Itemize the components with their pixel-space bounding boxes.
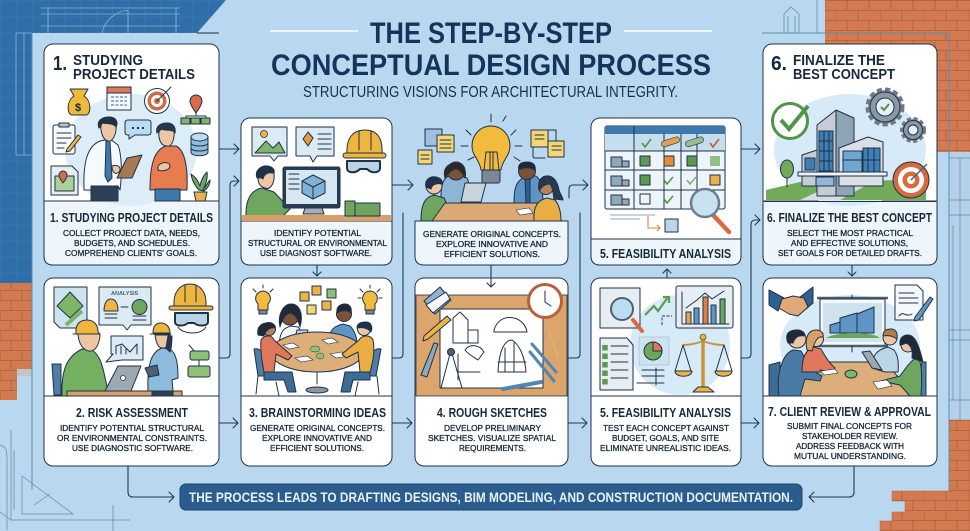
icon: safety goggles (347, 161, 380, 172)
caption: identify: USE DIAGNOST SOFTWARE. (260, 248, 372, 258)
icon: computer monitor (283, 167, 340, 214)
figure: man with clipboard (84, 117, 142, 201)
panel: step 4 rough sketches (415, 278, 568, 466)
caption: step 6: 6. FINALIZE THE BEST CONCEPT (767, 210, 932, 225)
caption: identify: STRUCTURAL OR ENVIRONMENTAL (248, 238, 387, 248)
icon: magnifier (691, 189, 729, 232)
icon: trend arrow (645, 297, 669, 315)
caption: step 2: USE DIAGNOSTIC SOFTWARE. (72, 443, 193, 453)
icon: presentation screen (817, 295, 888, 352)
panel: risk assessment software (241, 118, 392, 265)
caption: step 7: ADDRESS FEEDBACK WITH (796, 441, 904, 451)
connectors (128, 144, 856, 502)
caption: step 3: GENERATE ORIGINAL CONCEPTS. (250, 423, 385, 433)
icon: compass (421, 343, 462, 388)
icon: hard hat (343, 130, 386, 158)
icon: building (798, 110, 887, 196)
icon: pens (503, 332, 558, 389)
caption: step 4: DEVELOP PRELIMINARY (444, 423, 541, 433)
caption: generate (423, 229, 561, 259)
icon: target (893, 162, 929, 198)
caption: step 6: AND EFFECTIVE SOLUTIONS, (791, 238, 908, 248)
caption: step 7 (768, 404, 931, 461)
figure: woman in orange (802, 330, 838, 375)
icon: signed contract (895, 285, 933, 321)
title (270, 17, 712, 82)
grass (766, 180, 926, 200)
icon: balance scale (675, 334, 732, 392)
figures: team at table (421, 162, 543, 221)
icon: money bag: $ (75, 102, 81, 114)
icon: light bulb (461, 114, 522, 183)
icon: magnifier report (600, 288, 642, 331)
figure: man in yellow chair (341, 322, 381, 396)
table (271, 332, 363, 393)
icon: pencil (423, 316, 451, 341)
title: THE STEP-BY-STEP (370, 17, 612, 50)
caption: step 4: 4. ROUGH SKETCHES (437, 405, 547, 420)
drafting lines bottom left (0, 430, 130, 531)
figure: engineer with laptop (52, 320, 182, 396)
icon: database (191, 133, 208, 156)
icon: map pin org chart (181, 95, 210, 124)
heading: step 6: 6. (771, 53, 787, 75)
caption: generate: EXPLORE INNOVATIVE AND (436, 239, 548, 249)
icon: handshake (769, 287, 813, 316)
caption: step 7: STAKEHOLDER REVIEW. (802, 431, 898, 441)
caption: step 6 (767, 210, 932, 258)
icon: gears (868, 90, 924, 141)
arrow: down into step 4 (487, 278, 495, 287)
sketch sheet (440, 309, 543, 388)
icon: coffee mug (845, 370, 857, 378)
icon: flow blocks (188, 345, 210, 377)
caption: step 5 (600, 405, 731, 453)
caption: identify (248, 228, 387, 258)
caption: step 3: 3. BRAINSTORMING IDEAS (249, 405, 386, 420)
icon: sticky notes (300, 286, 336, 314)
caption: step 5: BUDGET, GOALS, AND SITE (612, 433, 719, 443)
icon: site plan (54, 287, 87, 328)
figure: man in orange sweater (150, 123, 187, 201)
caption: step 5 top: 5. FEASIBILITY ANALYSIS (600, 246, 731, 261)
caption: step 3 (249, 405, 386, 453)
figure: man with laptop (862, 329, 898, 372)
icon: clipboard list (53, 123, 81, 154)
figure: woman in orange chair (254, 322, 296, 396)
brick wall left (0, 283, 32, 400)
icon: target (144, 87, 171, 114)
desk and boxes (242, 201, 391, 221)
heading: step 6: BEST CONCEPT (793, 66, 895, 83)
blue building right (949, 152, 970, 420)
panel: feasibility matrix (591, 118, 741, 265)
panel: step 6 finalize the best concept (763, 44, 937, 265)
chart: pie chart (637, 337, 669, 385)
caption: step 2: 2. RISK ASSESSMENT (76, 405, 188, 420)
icon: checklist (600, 338, 633, 390)
icon: speech bubble (125, 120, 151, 139)
icon: calendar (107, 87, 131, 110)
figure: woman in green (873, 335, 926, 396)
caption: step 4: REQUIREMENTS. (459, 443, 526, 453)
caption: step 2: OR ENVIRONMENTAL CONSTRAINTS. (57, 433, 207, 443)
heading: step 1 (53, 52, 195, 83)
chart: evaluation matrix (605, 126, 725, 209)
heading: step 6 (771, 52, 895, 83)
icon: goggles (175, 313, 208, 326)
icon: site map (51, 166, 78, 195)
panel: step 7 client review and approval (763, 278, 937, 466)
banner: process outcome (180, 484, 802, 510)
icon: left light bulb (253, 285, 273, 314)
table (432, 203, 562, 221)
drafting desk (416, 295, 567, 396)
figure: woman in yellow (516, 176, 563, 221)
icon: right light bulb (358, 285, 382, 314)
caption: step 3: EXPLORE INNOVATIVE AND (262, 433, 372, 443)
icon: landscape image (252, 127, 287, 161)
caption: step 4 (428, 405, 556, 453)
panel: step 2 risk assessment (44, 278, 219, 466)
banner: process outcome: THE PROCESS LEADS TO DRAFTING DESIGNS, BIM MODELING, AND CONSTRUCTION DOCUMENTATION. (189, 489, 793, 505)
caption: step 1: 1. STUDYING PROJECT DETAILS (50, 210, 213, 225)
caption: step 5: 5. FEASIBILITY ANALYSIS (600, 405, 731, 420)
icon: dashed connector (662, 316, 672, 325)
caption: step 2 (57, 405, 207, 453)
caption: step 1: COMPREHEND CLIENTS' GOALS. (65, 248, 197, 258)
icon: plant (191, 172, 210, 201)
caption: identify: IDENTIFY POTENTIAL (274, 228, 361, 238)
caption: step 4: SKETCHES. VISUALIZE SPATIAL (428, 433, 556, 443)
panel: step 5 feasibility analysis (591, 278, 741, 466)
brick wall bottom right (880, 420, 970, 531)
icon: goggles strap (178, 327, 206, 333)
caption: step 1 (50, 210, 213, 258)
icon: flow note (610, 215, 678, 232)
panel: step 3 brainstorming ideas (241, 278, 392, 466)
caption: step 6: SET GOALS FOR DETAILED DRAFTS. (778, 248, 922, 258)
heading: step 1: 1. (53, 53, 67, 75)
subtitle: STRUCTURING VISIONS FOR ARCHITECTURAL INTEGRITY. (303, 84, 678, 101)
caption: step 7: MUTUAL UNDERSTANDING. (794, 451, 906, 461)
caption: step 5: ELIMINATE UNREALISTIC IDEAS. (600, 443, 731, 453)
icon: clock (528, 284, 562, 318)
caption: step 7: SUBMIT FINAL CONCEPTS FOR (787, 421, 912, 431)
caption: step 2: IDENTIFY POTENTIAL STRUCTURAL (60, 423, 204, 433)
brick wall top right (825, 0, 970, 152)
caption: generate: EFFICIENT SOLUTIONS. (444, 249, 540, 259)
caption: step 5: TEST EACH CONCEPT AGAINST (603, 423, 730, 433)
icon: check badge (772, 104, 808, 138)
icon: tape roll (424, 287, 451, 314)
icon: hard hat (169, 284, 213, 310)
caption: step 7: 7. CLIENT REVIEW & APPROVAL (768, 404, 931, 419)
caption: step 3: EFFICIENT SOLUTIONS. (270, 443, 364, 453)
table (785, 362, 915, 396)
icon: analysis bubble (99, 287, 151, 330)
icon: bridge bubble (106, 336, 143, 362)
caption: generate: GENERATE ORIGINAL CONCEPTS. (423, 229, 561, 239)
icon: money bag (68, 89, 90, 115)
title: CONCEPTUAL DESIGN PROCESS (271, 49, 711, 82)
icon: sticky notes left (418, 129, 454, 164)
icon: analysis bubble (296, 127, 334, 162)
figure: person at computer (246, 166, 290, 218)
icon: sticky notes right (531, 130, 564, 158)
panel: step 1 studying project details (44, 44, 219, 265)
caption: step 1: BUDGETS, AND SCHEDULES. (74, 238, 190, 248)
caption: step 1: COLLECT PROJECT DATA, NEEDS, (63, 228, 200, 238)
heading: step 6: FINALIZE THE (793, 52, 885, 69)
house outline top (784, 0, 817, 33)
caption: step 6: SELECT THE MOST PRACTICAL (787, 228, 913, 238)
figure: woman with tablet (145, 323, 178, 396)
blueprint corner (0, 0, 226, 283)
heading: step 1: STUDYING (73, 52, 143, 69)
heading: step 1: PROJECT DETAILS (73, 66, 195, 83)
icon: analysis bubble: ANALYSIS (111, 291, 139, 297)
figure: man in suit (769, 330, 822, 396)
chart: bar chart (676, 286, 733, 328)
panel: brainstorming concepts (415, 114, 568, 265)
figures: back pair (279, 304, 357, 345)
icon: tree (780, 160, 794, 187)
